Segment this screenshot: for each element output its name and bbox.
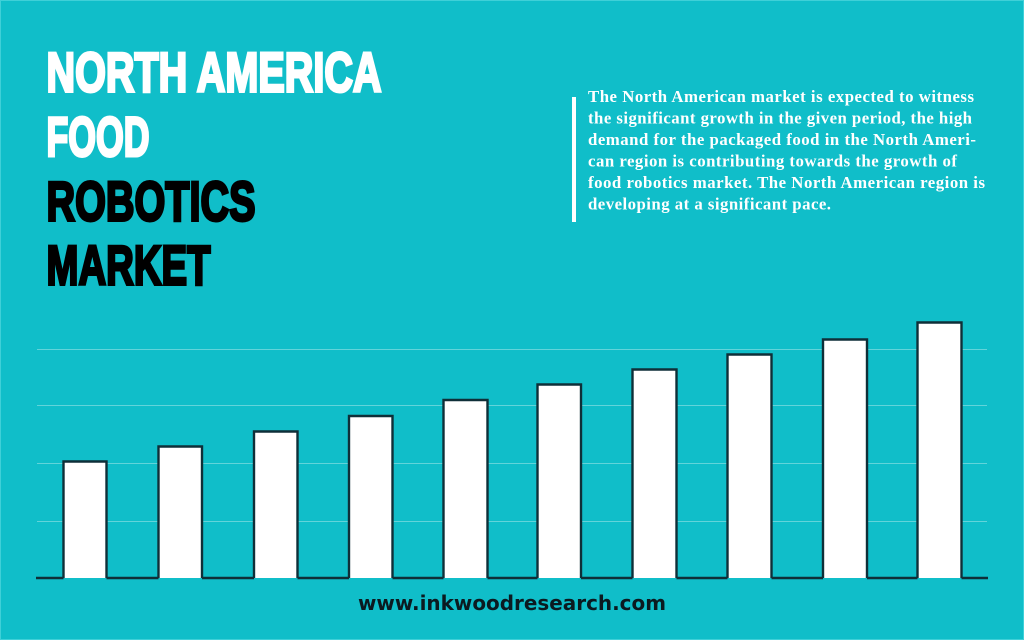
description text: can region is contributing towards the growth of (588, 152, 957, 170)
title: FOOD (46, 105, 150, 168)
description text: The North American market is expected to witness (588, 87, 974, 106)
title (46, 40, 382, 296)
description text: demand for the packaged food in the North Ameri- (588, 130, 976, 149)
description text: the significant growth in the given period, the high (588, 108, 973, 128)
axis baseline (36, 577, 988, 579)
description text (588, 87, 985, 214)
title: MARKET (46, 234, 210, 296)
accent bar (572, 97, 576, 222)
bars (64, 322, 962, 578)
description text: developing at a significant pace. (588, 194, 831, 214)
bar chart (36, 322, 988, 578)
description text: food robotics market. The North American region is (588, 173, 985, 192)
title: ROBOTICS (46, 170, 256, 232)
website url: www.inkwoodresearch.com (358, 591, 666, 615)
title: NORTH AMERICA (46, 40, 382, 104)
